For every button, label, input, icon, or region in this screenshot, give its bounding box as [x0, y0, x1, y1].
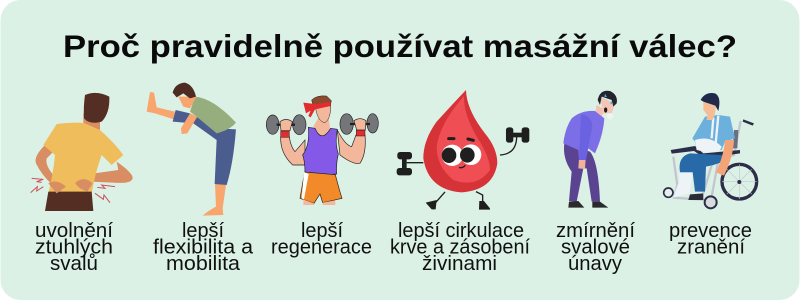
illustration: tired man bending [563, 91, 617, 208]
label: uvolnění ztuhlých svalů: svalů [50, 253, 98, 275]
label: lepší regenerace: regenerace [271, 236, 372, 258]
label: prevence zranění: zranění [677, 236, 745, 258]
label: uvolnění ztuhlých svalů: uvolnění [35, 220, 113, 242]
illustration: bodybuilder with dumbbells [266, 96, 378, 205]
title: Proč pravidelně používat masážní válec? [63, 28, 737, 64]
label: lepší flexibilita a mobilita: lepší [182, 220, 224, 242]
illustration: man with back pain [31, 93, 133, 211]
label: lepší cirkulace krve a zásobení živinami [390, 220, 530, 275]
label: zmírnění svalové únavy: svalové [561, 236, 630, 258]
label: lepší flexibilita a mobilita [153, 220, 254, 275]
label: uvolnění ztuhlých svalů: ztuhlých [35, 236, 113, 258]
label: lepší cirkulace krve a zásobení živinami: krve a zásobení [390, 236, 530, 258]
label: lepší cirkulace krve a zásobení živinami: živinami [422, 253, 497, 275]
label: zmírnění svalové únavy: zmírnění [556, 220, 635, 242]
label: zmírnění svalové únavy: únavy [568, 253, 622, 275]
label: lepší flexibilita a mobilita: mobilita [166, 253, 241, 275]
label: zmírnění svalové únavy [556, 220, 635, 275]
label: lepší cirkulace krve a zásobení živinami: lepší cirkulace [398, 220, 524, 242]
label: lepší flexibilita a mobilita: flexibilita a [153, 236, 254, 258]
label: lepší regenerace: lepší [301, 220, 343, 242]
label: lepší regenerace [271, 220, 372, 258]
label: prevence zranění: prevence [669, 220, 752, 242]
illustration: blood drop mascot with dumbbells [397, 90, 529, 210]
illustration: man stretching leg [147, 83, 236, 216]
label: prevence zranění [669, 220, 752, 258]
illustration: injured man in wheelchair [664, 93, 757, 208]
label: uvolnění ztuhlých svalů [35, 220, 113, 275]
